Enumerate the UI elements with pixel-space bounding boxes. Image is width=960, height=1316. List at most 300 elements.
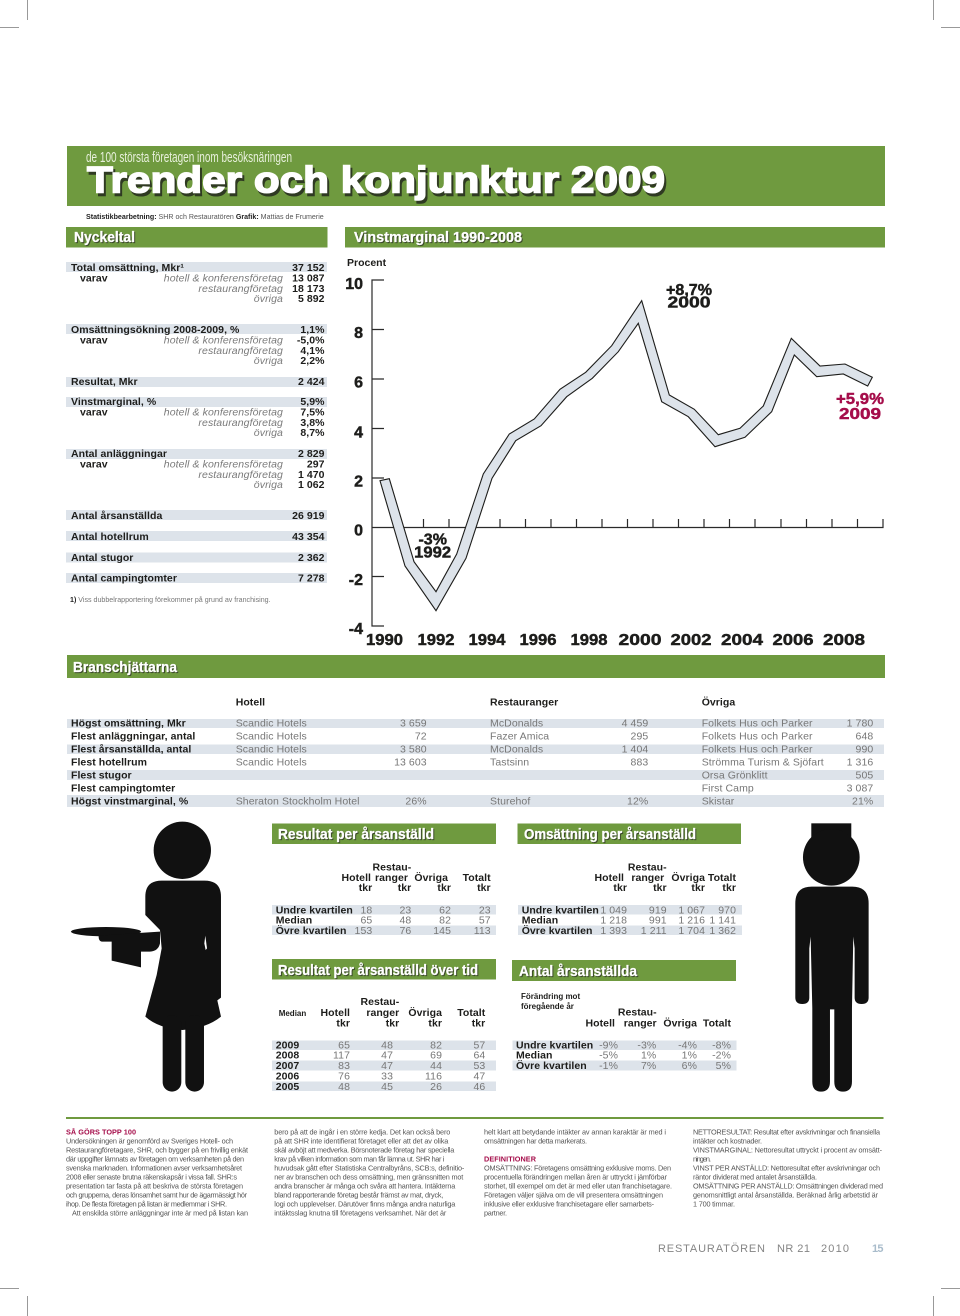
footer	[658, 1243, 884, 1255]
table: 2005	[276, 1081, 299, 1093]
footer: RESTAURATÖREN	[658, 1243, 765, 1255]
table: 47	[381, 1050, 393, 1062]
heading: Vinstmarginal: Vinstmarginal 1990-2008	[354, 230, 522, 246]
table: 23	[479, 904, 491, 916]
group: omsättningsökning: varav	[80, 334, 108, 346]
text block: column three with definitions: partner.	[484, 1208, 507, 1218]
table: -9%	[599, 1040, 618, 1052]
group: antal anläggningar: restaurangföretag	[198, 469, 283, 481]
table: 2008	[276, 1050, 299, 1062]
table: 48	[381, 1040, 393, 1052]
group: omsättningsökning: restaurangföretag	[198, 345, 283, 357]
table: 1 704	[678, 925, 705, 937]
table: 47	[473, 1070, 485, 1082]
group: antal anläggningar: 1 470	[298, 469, 325, 481]
y axis labels	[345, 276, 363, 638]
table: 1 067	[678, 904, 705, 916]
table: Undre kvartilen	[516, 1040, 593, 1052]
table: 82	[430, 1040, 442, 1052]
table: 48	[338, 1081, 350, 1093]
group: omsättningsökning: hotell & konferensföretag	[164, 334, 283, 346]
text block: column two: intäktsslag knutna till företagens verksamhet. När det är	[274, 1208, 447, 1218]
group: vinstmarginal: 5,9%	[300, 396, 325, 408]
group: resultat	[71, 376, 325, 388]
text block: Så görs topp 100: svenska marknaden. Informationen avser verksamhetsåret	[66, 1164, 242, 1172]
table: -1%	[599, 1060, 618, 1072]
x axis labels	[366, 632, 865, 649]
group: total omsättning: 37 152	[292, 262, 325, 274]
callout: 2000 high: +8,7%	[666, 282, 712, 299]
text block: column four definitions	[693, 1128, 883, 1208]
text block: column four definitions: genomsnittligt antal årsanställda. Beräknad årlig arbetstid är	[693, 1190, 879, 1200]
text block: column three with definitions: Företagen väljer själva om de vill presentera omsättningen	[484, 1190, 663, 1200]
table: 919	[649, 904, 667, 916]
group: antal anläggningar	[71, 448, 325, 491]
text block: Så görs topp 100: SÅ GÖRS TOPP 100	[66, 1128, 136, 1136]
title banner	[67, 146, 885, 206]
table: 991	[649, 915, 667, 927]
callout: 1992 low: 1992	[414, 544, 451, 562]
callout: 2009 value	[836, 391, 884, 423]
heading: Vinstmarginal	[345, 227, 885, 248]
table: 64	[473, 1050, 485, 1062]
table: 46	[473, 1081, 485, 1093]
panel: Omsättning per årsanställd	[518, 824, 742, 937]
table: industry leaders: Högst omsättning, Mkr	[71, 718, 186, 730]
page number: 15	[872, 1243, 884, 1255]
panel: Branschjättarna	[67, 655, 885, 808]
group: omsättningsökning	[71, 324, 325, 367]
table: 62	[439, 904, 451, 916]
table: industry leaders: Flest hotellrum	[71, 756, 147, 768]
table: Median	[276, 915, 312, 927]
x axis labels: 1998	[570, 632, 608, 649]
table: 116	[425, 1070, 442, 1082]
footer: NR 21	[777, 1243, 810, 1255]
table: 76	[338, 1070, 350, 1082]
text block: column four definitions: VINSTMARGINAL: Nettoresultat uttryckt i procent av omsätt-	[693, 1146, 883, 1154]
text block: column two: huvudsak gått efter Statistiska Centralbyråns, SCB:s, definitio-	[274, 1164, 465, 1172]
column headings	[236, 696, 735, 708]
y axis labels: 6	[354, 374, 363, 392]
main title: Trender och konjunktur 2009	[87, 160, 665, 200]
text block: Så görs topp 100: ihop. De flesta företagen på listan är medlemmar i SHR.	[66, 1200, 227, 1208]
x axis labels: 1994	[468, 632, 506, 649]
text block: column four definitions: intäkter och kostnader.	[693, 1136, 762, 1146]
group: omsättningsökning: övriga	[254, 355, 283, 367]
table: 2009	[276, 1040, 299, 1052]
text block: column three with definitions: DEFINITIONER	[484, 1154, 537, 1164]
y axis labels: 0	[354, 522, 363, 540]
text block: column two: krav på vilken information som man får lämna ut. SHR har i	[274, 1154, 445, 1164]
table: 1 218	[600, 915, 627, 927]
table: 53	[473, 1060, 485, 1072]
credits: Statistikbearbetning: SHR och Restauratören Grafik: Mattias de Frumerie	[86, 213, 324, 221]
group: antal rows: 26 919	[292, 510, 325, 522]
table: -4%	[678, 1040, 697, 1052]
heading: Branschjättarna: Branschjättarna	[73, 660, 178, 676]
table: industry leaders: McDonalds	[490, 744, 543, 756]
callout: 2000 high	[666, 282, 712, 312]
table: 83	[338, 1060, 350, 1072]
group: omsättningsökning: Omsättningsökning 2008-2009, %	[71, 324, 240, 336]
text block: column four definitions: räntor dividerat med antalet årsanställda.	[693, 1172, 817, 1182]
divider rule	[66, 1117, 884, 1119]
text block: column three with definitions: omsättningen har detta markerats.	[484, 1136, 587, 1146]
table: 65	[338, 1040, 350, 1052]
table: industry leaders: 505	[856, 770, 873, 782]
group: total omsättning: 13 087	[292, 272, 325, 284]
text block: Så görs topp 100: där uppgifter lämnats av företagen om verksamheten på den	[66, 1154, 244, 1164]
group: omsättningsökning: 2,2%	[300, 355, 325, 367]
table: industry leaders: Folkets Hus och Parker	[702, 730, 813, 742]
table: Undre kvartilen	[522, 904, 599, 916]
group: antal rows: 43 354	[292, 531, 325, 543]
group: total omsättning: övriga	[254, 293, 283, 305]
callout: 1992 low: -3%	[418, 532, 447, 548]
group: total omsättning: 5 892	[298, 293, 325, 305]
table: tkr	[386, 1017, 399, 1029]
heading: Omsättning per årsanställd	[524, 827, 696, 843]
text block: column two: logi och upplevelser. Därutöver finns många andra naturliga	[274, 1200, 456, 1208]
heading	[518, 824, 741, 844]
table: 33	[381, 1070, 393, 1082]
axis title: Procent	[347, 257, 387, 269]
panel: Resultat per årsanställd	[272, 824, 496, 937]
table: 65	[360, 915, 372, 927]
table: industry leaders: 13 603	[394, 756, 427, 768]
table: industry leaders: 3 659	[400, 718, 427, 730]
group: vinstmarginal: Vinstmarginal, %	[71, 396, 157, 408]
x axis labels: 2004	[721, 632, 763, 649]
panel: Antal årsanställda	[512, 960, 736, 1072]
table: 48	[399, 915, 411, 927]
group: antal anläggningar: hotell & konferensföretag	[164, 458, 283, 470]
heading: Resultat per årsanställd över tid	[278, 963, 478, 979]
text block: column two: andra branscher är många och svåra att hantera. Intäkterna	[274, 1182, 456, 1190]
y axis labels: -4	[349, 621, 363, 638]
table: Hotell	[342, 872, 371, 884]
table: industry leaders: 990	[856, 744, 873, 756]
group: resultat: Resultat, Mkr	[71, 376, 138, 388]
table: industry leaders: 648	[856, 730, 873, 742]
table: -8%	[712, 1040, 731, 1052]
table: industry leaders: 295	[631, 730, 648, 742]
table: Förändring mot	[521, 992, 580, 1001]
text block: column three with definitions: procentuella förändringen mellan åren är uttryckt i jämförbar	[484, 1172, 668, 1182]
table: Totalt	[457, 1007, 486, 1019]
text block: Så görs topp 100	[66, 1128, 248, 1218]
table: tkr	[653, 882, 667, 894]
table: Övriga	[671, 871, 705, 884]
callout: 2009 value: +5,9%	[836, 391, 884, 408]
table: Median	[522, 915, 558, 927]
table: 153	[355, 925, 372, 937]
table: 1 393	[600, 925, 627, 937]
table: industry leaders: Sturehof	[490, 796, 530, 808]
text block: column four definitions: OMSÄTTNING PER ANSTÄLLD: Omsättningen dividerad med	[693, 1182, 883, 1190]
x axis labels: 1990	[366, 632, 403, 649]
table: industry leaders: 883	[631, 756, 648, 768]
text block: column two: skäl avböjt att medverka. Börsnoterade företag har speciella	[274, 1146, 455, 1154]
data line: profit margin 1990-2009	[380, 301, 872, 611]
table: industry leaders: 1 780	[847, 718, 873, 730]
table: industry leaders: 72	[415, 730, 427, 742]
y axis labels: 2	[354, 474, 363, 490]
text block: column four definitions: ningen.	[693, 1154, 711, 1164]
group: vinstmarginal: hotell & konferensföretag	[164, 406, 283, 418]
group: vinstmarginal: 8,7%	[300, 427, 325, 439]
group: omsättningsökning: -5,0%	[297, 334, 325, 346]
column headings: Hotell	[236, 696, 265, 708]
table: Totalt	[703, 1017, 731, 1029]
text block: column four definitions: VINST PER ANSTÄLLD: Nettoresultat efter avskrivningar och	[693, 1164, 880, 1172]
group: antal rows: Antal årsanställda	[71, 510, 162, 522]
text block: Så görs topp 100: 2008 eller senaste brutna räkenskapsår i vissa fall. SHR:s	[66, 1172, 237, 1182]
group: vinstmarginal: restaurangföretag	[198, 417, 283, 429]
group: antal rows: Antal campingtomter	[71, 572, 177, 584]
panel: Nyckeltal	[66, 227, 328, 604]
table: 1%	[682, 1050, 697, 1062]
table: 1 362	[709, 925, 736, 937]
table: tkr	[691, 882, 705, 894]
group: total omsättning: restaurangföretag	[198, 283, 283, 295]
y axis labels: 4	[354, 424, 363, 442]
table: Hotell	[321, 1007, 350, 1019]
table: industry leaders: Flest campingtomter	[71, 782, 175, 794]
table: industry leaders: Flest stugor	[71, 770, 132, 782]
text block: column two: bland rapporterande företag består främst av mat, dryck,	[274, 1190, 443, 1200]
group: antal anläggningar: 1 062	[298, 479, 325, 491]
group: vinstmarginal	[71, 396, 325, 439]
group: vinstmarginal: 3,8%	[300, 417, 325, 429]
table: Övre kvartilen	[522, 924, 592, 937]
group: antal anläggningar: 297	[307, 458, 325, 470]
table: Totalt	[463, 872, 491, 884]
heading: Antal årsanställda	[519, 964, 638, 980]
group: omsättningsökning: 4,1%	[300, 345, 325, 357]
table: industry leaders: 1 316	[847, 756, 873, 768]
table: 1 049	[600, 904, 627, 916]
text block: column two: ner av branschen och dess omsättning, men gränssnitten mot	[274, 1172, 463, 1182]
table: 6%	[682, 1060, 697, 1072]
group: antal rows: Antal hotellrum	[71, 531, 149, 543]
text block: column four definitions: 1 700 timmar.	[693, 1200, 735, 1208]
table: 57	[473, 1040, 485, 1052]
text block: Så görs topp 100: Restaurangföretagare, SHR, och bygger på en frivillig enkät	[66, 1146, 248, 1154]
text block: column two: på att SHR inte identifierat företaget eller att det av olika	[274, 1136, 449, 1146]
table: 47	[381, 1060, 393, 1072]
callout: 2000 high: 2000	[668, 294, 711, 312]
table: Restau-	[360, 996, 400, 1008]
table: Övriga	[408, 1006, 442, 1019]
heading: Nyckeltal: Nyckeltal	[74, 230, 135, 246]
x axis labels: 2008	[823, 632, 865, 649]
group: antal rows: Antal stugor	[71, 552, 133, 564]
x axis labels: 2006	[772, 632, 814, 649]
table: 5%	[716, 1060, 731, 1072]
text block: Så görs topp 100: och grupperna, deras lönsamhet samt hur de ägarmässigt hör	[66, 1190, 248, 1200]
table: 57	[479, 915, 491, 927]
table: 1 141	[709, 915, 736, 927]
group: antal anläggningar: övriga	[254, 479, 283, 491]
table: tkr	[359, 882, 372, 894]
table: industry leaders: Orsa Grönklitt	[702, 770, 768, 782]
table: -5%	[599, 1050, 618, 1062]
group: resultat: 2 424	[298, 376, 325, 388]
x axis labels: 2000	[618, 632, 662, 649]
group: total omsättning: varav	[80, 272, 108, 284]
table: industry leaders: 3 087	[847, 782, 873, 794]
callout: 2009 value: 2009	[839, 406, 881, 423]
group: vinstmarginal: 7,5%	[300, 406, 325, 418]
table: Restau-	[618, 1007, 657, 1019]
axes	[372, 280, 883, 626]
table: tkr	[472, 1017, 485, 1029]
table: tkr	[477, 882, 491, 894]
table: Median	[516, 1050, 552, 1062]
table: 2007	[276, 1060, 299, 1072]
table	[516, 992, 731, 1072]
heading: Nyckeltal	[66, 227, 328, 248]
group: antal anläggningar: varav	[80, 458, 108, 470]
table: Övriga	[663, 1016, 697, 1029]
table: industry leaders: Flest årsanställda, antal	[71, 744, 191, 756]
table: industry leaders: Scandic Hotels	[236, 730, 307, 742]
table: industry leaders	[71, 718, 873, 808]
table: industry leaders: Fazer Amica	[490, 730, 549, 742]
table: tkr	[398, 882, 411, 894]
table: Restau-	[372, 862, 412, 874]
table: 44	[430, 1060, 442, 1072]
text block: column two	[274, 1128, 465, 1218]
group: vinstmarginal: övriga	[254, 427, 283, 439]
text block: column three with definitions: helt klart att betydande intäkter av annan karaktär är med i	[484, 1128, 666, 1136]
table: industry leaders: 4 459	[622, 718, 648, 730]
table: industry leaders: Scandic Hotels	[236, 718, 307, 730]
table: -2%	[712, 1050, 731, 1062]
group: antal anläggningar: Antal anläggningar	[71, 448, 167, 460]
table: industry leaders: Folkets Hus och Parker	[702, 718, 813, 730]
table: 117	[333, 1050, 350, 1062]
table: ranger	[631, 872, 664, 884]
table: 1%	[641, 1050, 656, 1062]
table: 7%	[641, 1060, 656, 1072]
text block: column four definitions: NETTORESULTAT: Resultat efter avskrivningar och finansiella	[693, 1128, 881, 1136]
heading: Resultat per årsanställd	[278, 827, 434, 843]
heading: Branschjättarna	[67, 655, 885, 678]
table	[276, 996, 486, 1093]
column headings: Övriga	[702, 696, 735, 708]
table: Övriga	[414, 871, 448, 884]
y axis labels: 10	[345, 276, 363, 293]
table: industry leaders: Strömma Turism & Sjöfart	[702, 756, 824, 768]
table: 45	[381, 1081, 393, 1093]
table: industry leaders: Scandic Hotels	[236, 744, 307, 756]
group: antal anläggningar: 2 829	[298, 448, 325, 460]
group: antal rows: 7 278	[298, 572, 325, 584]
table: 26	[430, 1081, 442, 1093]
text block: Så görs topp 100: presentation tar fasta på att beskriva de största företagen	[66, 1182, 243, 1190]
table: industry leaders: 12%	[627, 796, 648, 808]
table: Restau-	[628, 862, 667, 874]
table: 18	[360, 904, 372, 916]
table	[276, 862, 491, 937]
table: industry leaders: Sheraton Stockholm Hotel	[236, 796, 360, 808]
text block: column three with definitions: storhet, till exempel om det är med eller utan franchisetagare.	[484, 1182, 672, 1190]
table: 145	[433, 925, 451, 937]
y axis labels: -2	[349, 572, 363, 589]
table: industry leaders: Flest anläggningar, antal	[71, 730, 195, 742]
table: 2006	[276, 1070, 299, 1082]
y axis labels: 8	[354, 325, 363, 342]
group: antal rows	[71, 510, 325, 584]
heading	[512, 960, 736, 981]
table: industry leaders: McDonalds	[490, 718, 543, 730]
table: industry leaders: Tastsinn	[490, 756, 529, 768]
table: industry leaders: Folkets Hus och Parker	[702, 744, 813, 756]
table: industry leaders: Högst vinstmarginal, %	[71, 796, 189, 808]
table: ranger	[624, 1017, 657, 1029]
heading	[272, 824, 496, 844]
footnote: 1) Viss dubbelrapportering förekommer på grund av franchising.	[70, 596, 271, 604]
table: -3%	[637, 1040, 656, 1052]
table: tkr	[437, 882, 451, 894]
x axis labels: 1992	[418, 632, 455, 649]
table: 69	[430, 1050, 442, 1062]
table: industry leaders: Skistar	[702, 796, 735, 808]
table: ranger	[375, 872, 408, 884]
table: Övre kvartilen	[276, 924, 346, 937]
x axis labels: 1996	[520, 632, 557, 649]
group: vinstmarginal: varav	[80, 406, 108, 418]
table: 970	[718, 904, 736, 916]
footer: 2010	[821, 1243, 849, 1255]
table: 1 216	[678, 915, 705, 927]
table: industry leaders: 3 580	[400, 744, 427, 756]
group: total omsättning	[71, 262, 325, 305]
icon: waitress silhouette	[71, 822, 221, 1092]
table: 1 211	[641, 925, 667, 937]
text block: column three with definitions: OMSÄTTNING: Företagens omsättning exklusive moms. Den	[484, 1164, 671, 1172]
table: Undre kvartilen	[276, 904, 353, 916]
group: total omsättning: hotell & konferensföretag	[164, 272, 283, 284]
text block: Så görs topp 100: Att enskilda större anläggningar inte är med på listan kan	[72, 1208, 248, 1218]
table: Hotell	[586, 1017, 615, 1029]
table: industry leaders: First Camp	[702, 782, 754, 794]
table: Totalt	[708, 872, 736, 884]
table: Övre kvartilen	[516, 1059, 587, 1072]
text block: column three with definitions: inklusive eller exklusive franchisetagare eller samarbets-	[484, 1200, 655, 1208]
subtitle: de 100 största företagen inom besöksnäringen	[86, 149, 292, 166]
group: total omsättning: 18 173	[292, 283, 325, 295]
table: industry leaders: 26%	[405, 796, 427, 808]
table: föregående år	[521, 1002, 574, 1011]
x axis labels: 2002	[670, 632, 712, 649]
table: 113	[474, 925, 491, 937]
text block: column three with definitions	[484, 1128, 672, 1218]
table: tkr	[613, 882, 627, 894]
group: total omsättning: Total omsättning, Mkr¹	[71, 262, 184, 274]
icon: man with hat silhouette	[795, 823, 869, 1092]
table	[522, 862, 736, 937]
table: Median	[279, 1009, 306, 1018]
group: omsättningsökning: 1,1%	[300, 324, 325, 336]
table: 23	[399, 904, 411, 916]
table: tkr	[336, 1017, 350, 1029]
table: Hotell	[595, 872, 624, 884]
callout: 1992 low	[414, 532, 451, 562]
